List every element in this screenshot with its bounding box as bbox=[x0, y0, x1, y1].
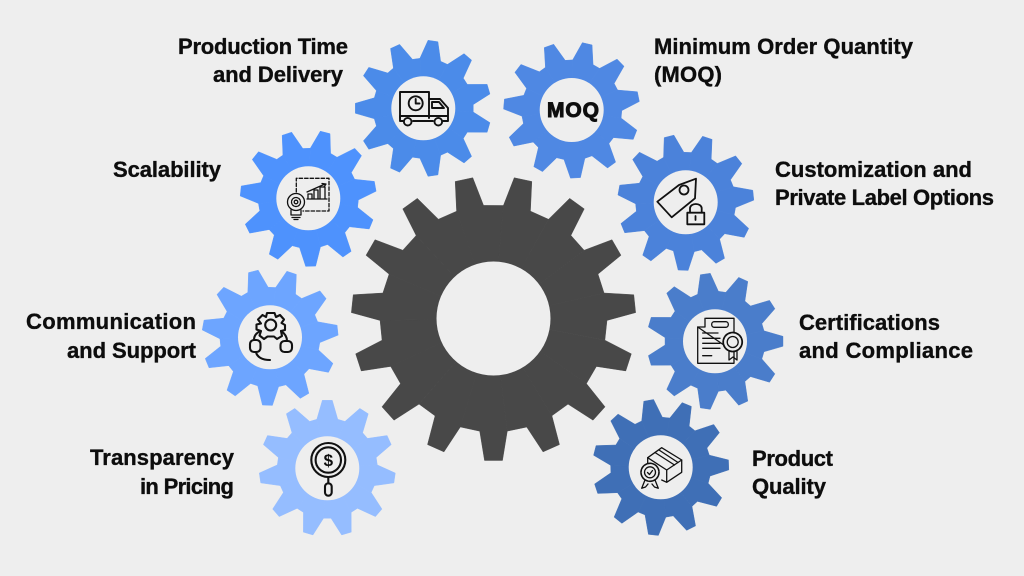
label: customization and private label options bbox=[775, 157, 994, 210]
label: communication and support bbox=[26, 309, 197, 363]
label: minimum order quantity: Minimum Order Quantity bbox=[654, 34, 914, 59]
gear: scalability bbox=[237, 126, 380, 269]
label: transparency in pricing: Transparency bbox=[90, 445, 235, 470]
icon: box with rosette bbox=[641, 448, 682, 488]
label: transparency in pricing: in Pricing bbox=[140, 474, 234, 499]
gear: product quality bbox=[588, 395, 731, 539]
label: product quality bbox=[752, 446, 834, 499]
label: minimum order quantity bbox=[654, 34, 914, 87]
icon: tag and padlock bbox=[657, 179, 704, 224]
icon: dollar magnifier bbox=[311, 443, 345, 496]
central dark gear bbox=[348, 173, 638, 462]
label: scalability: Scalability bbox=[113, 157, 222, 182]
gear: transparency in pricing bbox=[257, 400, 396, 539]
icon: bulb gear and growth chart bbox=[288, 178, 329, 220]
label: certifications and compliance: and Compliance bbox=[799, 338, 973, 363]
label: production time and delivery: Production Time bbox=[178, 34, 348, 59]
icon: dollar sign: $ bbox=[324, 451, 334, 470]
gear: certifications and compliance bbox=[645, 271, 783, 410]
icon: certificate document bbox=[698, 318, 742, 363]
label: certifications and compliance bbox=[799, 310, 973, 363]
icon: MOQ text: MOQ bbox=[547, 99, 599, 122]
label: certifications and compliance: Certifications bbox=[799, 310, 940, 335]
label: product quality: Quality bbox=[752, 474, 827, 499]
label: transparency in pricing bbox=[90, 445, 235, 499]
icon: gear headset bbox=[250, 313, 292, 360]
label: production time and delivery bbox=[178, 34, 348, 87]
gear: minimum order quantity bbox=[498, 35, 648, 186]
label: production time and delivery: and Delivery bbox=[213, 62, 344, 87]
label: communication and support: and Support bbox=[67, 338, 197, 363]
gear: customization and private label bbox=[609, 126, 761, 278]
gear: production time and delivery bbox=[355, 39, 494, 178]
label: product quality: Product bbox=[752, 446, 834, 471]
label: minimum order quantity: (MOQ) bbox=[654, 62, 722, 87]
label: customization and private label options: Private Label Options bbox=[775, 185, 994, 210]
gear: communication and support bbox=[193, 261, 345, 413]
label: customization and private label options: Customization and bbox=[775, 157, 972, 182]
label: communication and support: Communication bbox=[26, 309, 196, 334]
icon: delivery truck bbox=[400, 92, 448, 125]
